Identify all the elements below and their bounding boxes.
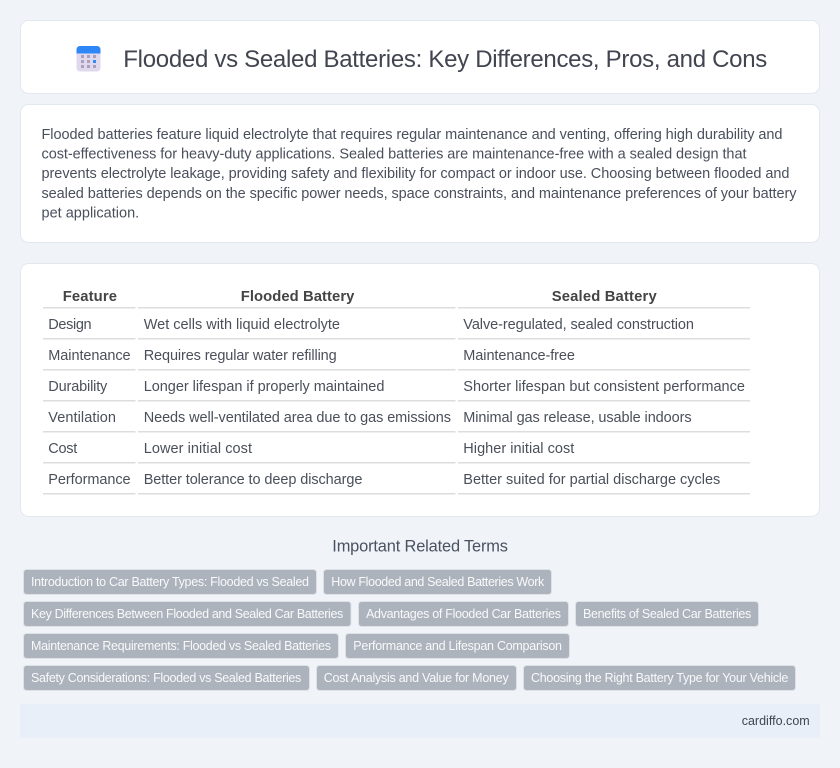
title: Flooded vs Sealed Batteries: Key Differences, Pros, and Cons xyxy=(123,46,767,73)
row: durability: Longer lifespan if properly maintained xyxy=(144,379,384,395)
tag: Choosing the Right Battery Type for Your Vehicle xyxy=(531,671,788,685)
tag xyxy=(24,570,316,594)
text block: intro: prevents electrolyte leakage, providing safety and flexibility for compact or indoor use. Choosing between flooded and xyxy=(42,166,790,182)
tag: Cost Analysis and Value for Money xyxy=(324,671,509,685)
panel: title header xyxy=(20,20,820,94)
tag xyxy=(358,602,568,626)
row: cost: Cost xyxy=(48,441,77,457)
tag xyxy=(346,634,570,658)
row: performance: Better suited for partial discharge cycles xyxy=(463,472,720,488)
row: design xyxy=(48,317,694,333)
text block: intro xyxy=(42,127,797,221)
tag: How Flooded and Sealed Batteries Work xyxy=(331,575,545,589)
tag: Key Differences Between Flooded and Sealed Car Batteries xyxy=(31,607,343,621)
footer source: cardiffo.com xyxy=(742,714,810,728)
table header: Feature xyxy=(63,289,117,305)
row: performance: Performance xyxy=(48,472,131,488)
tag: Introduction to Car Battery Types: Flooded vs Sealed xyxy=(31,575,309,589)
text block: intro: Flooded batteries feature liquid electrolyte that requires regular maintenance and venting, offering high durability and xyxy=(42,127,782,143)
row: performance xyxy=(48,472,720,488)
row: cost: Lower initial cost xyxy=(144,441,252,457)
row: maintenance xyxy=(48,348,575,364)
tag xyxy=(24,602,351,626)
row: design: Design xyxy=(48,317,92,333)
row: durability: Durability xyxy=(48,379,108,395)
row: maintenance: Maintenance-free xyxy=(463,348,575,364)
footer xyxy=(20,704,820,738)
row: design: Wet cells with liquid electrolyte xyxy=(144,317,340,333)
table header: Flooded Battery xyxy=(241,289,355,305)
tag xyxy=(524,666,796,690)
row: ventilation: Minimal gas release, usable indoors xyxy=(463,410,692,426)
heading: related terms: Important Related Terms xyxy=(332,538,508,556)
panel: related term tags xyxy=(24,570,796,690)
row: cost: Higher initial cost xyxy=(463,441,574,457)
text block: intro: sealed batteries depends on the specific power needs, space constraints, and maintenance preferences of your battery xyxy=(42,186,797,202)
text block: intro: pet application. xyxy=(42,205,139,221)
tag: Performance and Lifespan Comparison xyxy=(353,639,562,653)
table header: Sealed Battery xyxy=(552,289,657,305)
tag xyxy=(324,570,552,594)
panel: intro paragraph xyxy=(20,104,820,242)
tag: Maintenance Requirements: Flooded vs Sealed Batteries xyxy=(31,639,331,653)
row: ventilation: Ventilation xyxy=(48,410,116,426)
tag: Benefits of Sealed Car Batteries xyxy=(583,607,751,621)
tag xyxy=(24,666,310,690)
text block: intro: cost-effectiveness for heavy-duty applications. Sealed batteries are maintenance-free with a sealed design that xyxy=(42,147,746,163)
row: ventilation: Needs well-ventilated area due to gas emissions xyxy=(144,410,451,426)
row: performance: Better tolerance to deep discharge xyxy=(144,472,362,488)
tag xyxy=(24,634,338,658)
tag xyxy=(576,602,758,626)
row: design: Valve-regulated, sealed construction xyxy=(463,317,694,333)
row: cost xyxy=(48,441,574,457)
row: durability xyxy=(48,379,745,395)
panel: comparison table xyxy=(20,264,820,516)
row: maintenance: Maintenance xyxy=(48,348,131,364)
row: ventilation xyxy=(48,410,692,426)
table header xyxy=(63,289,657,305)
tag xyxy=(316,666,516,690)
icon: calendar xyxy=(76,46,100,72)
tag: Safety Considerations: Flooded vs Sealed Batteries xyxy=(31,671,301,685)
row: durability: Shorter lifespan but consistent performance xyxy=(463,379,745,395)
row: maintenance: Requires regular water refilling xyxy=(144,348,337,364)
tag: Advantages of Flooded Car Batteries xyxy=(366,607,561,621)
